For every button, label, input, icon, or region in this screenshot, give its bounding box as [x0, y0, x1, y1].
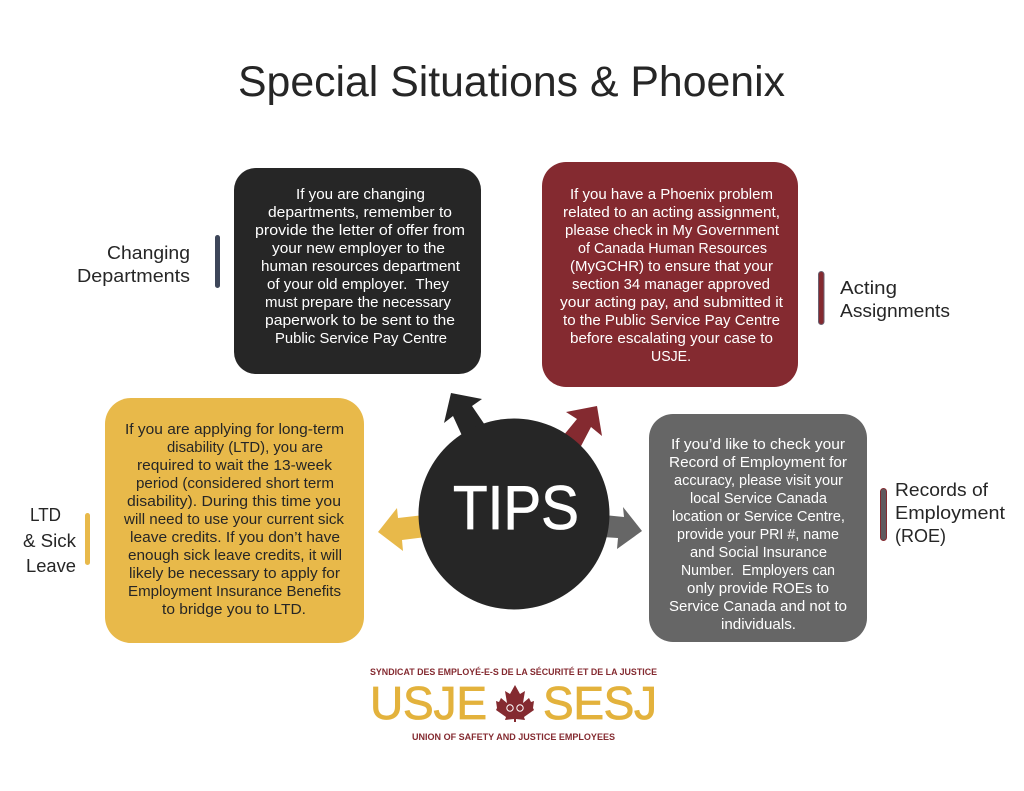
panel: changing departments: departments, remember to — [268, 205, 452, 221]
panel: records of employment: accuracy, please visit your — [674, 473, 843, 489]
panel: records of employment: Record of Employment for — [669, 455, 847, 471]
panel: changing departments: of your old employer. They — [267, 277, 450, 293]
panel: acting assignments: USJE. — [651, 349, 691, 365]
logo: usje sesj: SYNDICAT DES EMPLOYÉ-E-S DE LA SÉCURITÉ ET DE LA JUSTICE — [370, 667, 657, 677]
panel: changing departments — [234, 168, 481, 374]
panel: ltd and sick leave — [105, 398, 364, 643]
panel: acting assignments: of Canada Human Resources — [578, 241, 767, 257]
panel: changing departments: provide the letter of offer from — [255, 223, 465, 239]
panel: records of employment: only provide ROEs to — [687, 581, 829, 597]
arrow: to changing departments — [444, 393, 487, 440]
accent bar: ltd and sick leave — [85, 513, 90, 565]
logo: usje sesj: SESJ — [543, 677, 657, 729]
logo: usje sesj: UNION OF SAFETY AND JUSTICE EMPLOYEES — [412, 732, 615, 742]
panel: ltd and sick leave: enough sick leave credits, it will — [128, 548, 342, 564]
panel: ltd and sick leave: If you are applying for long-term — [125, 422, 344, 438]
panel: ltd and sick leave: Employment Insurance Benefits — [128, 584, 341, 600]
label: changing departments: Changing — [107, 242, 190, 263]
panel: records of employment: Number. Employers can — [681, 563, 835, 579]
accent bar: acting assignments — [818, 272, 824, 324]
title: Special Situations & Phoenix — [238, 58, 785, 106]
panel: ltd and sick leave: will need to use your current sick — [123, 512, 345, 528]
label: ltd and sick leave: & Sick — [23, 530, 77, 551]
panel: ltd and sick leave: disability). During this time you — [127, 494, 341, 510]
tips circle: TIPS — [453, 474, 579, 543]
panel: records of employment: provide your PRI #, name — [677, 527, 839, 543]
label: changing departments — [77, 242, 190, 286]
panel: acting assignments: before escalating your case to — [570, 331, 773, 347]
panel: records of employment: local Service Canada — [690, 491, 828, 507]
label: ltd and sick leave: LTD — [30, 504, 61, 525]
panel: ltd and sick leave: leave credits. If you don’t have — [130, 530, 340, 546]
accent bar: changing departments — [215, 235, 220, 288]
panel: ltd and sick leave: to bridge you to LTD. — [162, 602, 306, 618]
panel: changing departments: human resources department — [261, 259, 460, 275]
arrow: to ltd and sick leave — [378, 508, 426, 551]
label: records of employment: (ROE) — [895, 525, 946, 546]
label: records of employment: Records of — [895, 479, 989, 500]
panel: changing departments: must prepare the necessary — [265, 295, 452, 311]
panel: acting assignments: to the Public Service Pay Centre — [563, 313, 780, 329]
arrow: to acting assignments — [563, 406, 602, 448]
logo: usje sesj: USJE — [370, 677, 487, 729]
panel: acting assignments: related to an acting assignment, — [563, 205, 780, 221]
panel: records of employment: and Social Insurance — [690, 545, 827, 561]
icon: maple leaf — [496, 685, 534, 722]
panel: acting assignments: If you have a Phoenix problem — [570, 187, 773, 203]
panel: ltd and sick leave: likely be necessary to apply for — [129, 566, 340, 582]
panel: ltd and sick leave: period (considered short term — [136, 476, 334, 492]
logo: usje sesj — [370, 667, 657, 742]
panel: records of employment: location or Service Centre, — [672, 509, 845, 525]
label: acting assignments: Assignments — [840, 300, 950, 321]
panel: acting assignments: please check in My Government — [565, 223, 779, 239]
panel: records of employment: individuals. — [721, 617, 796, 633]
tips circle — [418, 418, 610, 610]
label: acting assignments: Acting — [840, 277, 897, 298]
arrow: to records of employment — [602, 507, 642, 549]
panel: records of employment: If you’d like to check your — [671, 437, 845, 453]
panel: records of employment: Service Canada and not to — [669, 599, 847, 615]
panel: acting assignments: your acting pay, and submitted it — [560, 295, 783, 311]
panel: acting assignments: (MyGCHR) to ensure that your — [570, 259, 773, 275]
panel: acting assignments — [542, 162, 798, 387]
panel: changing departments: If you are changing — [296, 187, 425, 203]
panel: ltd and sick leave: required to wait the 13-week — [137, 458, 333, 474]
label: acting assignments — [840, 277, 950, 321]
panel: changing departments: your new employer to the — [272, 241, 445, 257]
label: records of employment — [895, 479, 1005, 546]
label: ltd and sick leave — [23, 504, 77, 576]
panel: ltd and sick leave: disability (LTD), you are — [167, 440, 323, 456]
panel: changing departments: paperwork to be sent to the — [265, 313, 455, 329]
accent bar: records of employment — [880, 488, 886, 540]
panel: acting assignments: section 34 manager approved — [572, 277, 770, 293]
label: records of employment: Employment — [895, 502, 1005, 523]
label: ltd and sick leave: Leave — [26, 555, 76, 576]
label: changing departments: Departments — [77, 265, 190, 286]
panel: records of employment — [649, 414, 867, 642]
panel: changing departments: Public Service Pay Centre — [275, 331, 447, 347]
